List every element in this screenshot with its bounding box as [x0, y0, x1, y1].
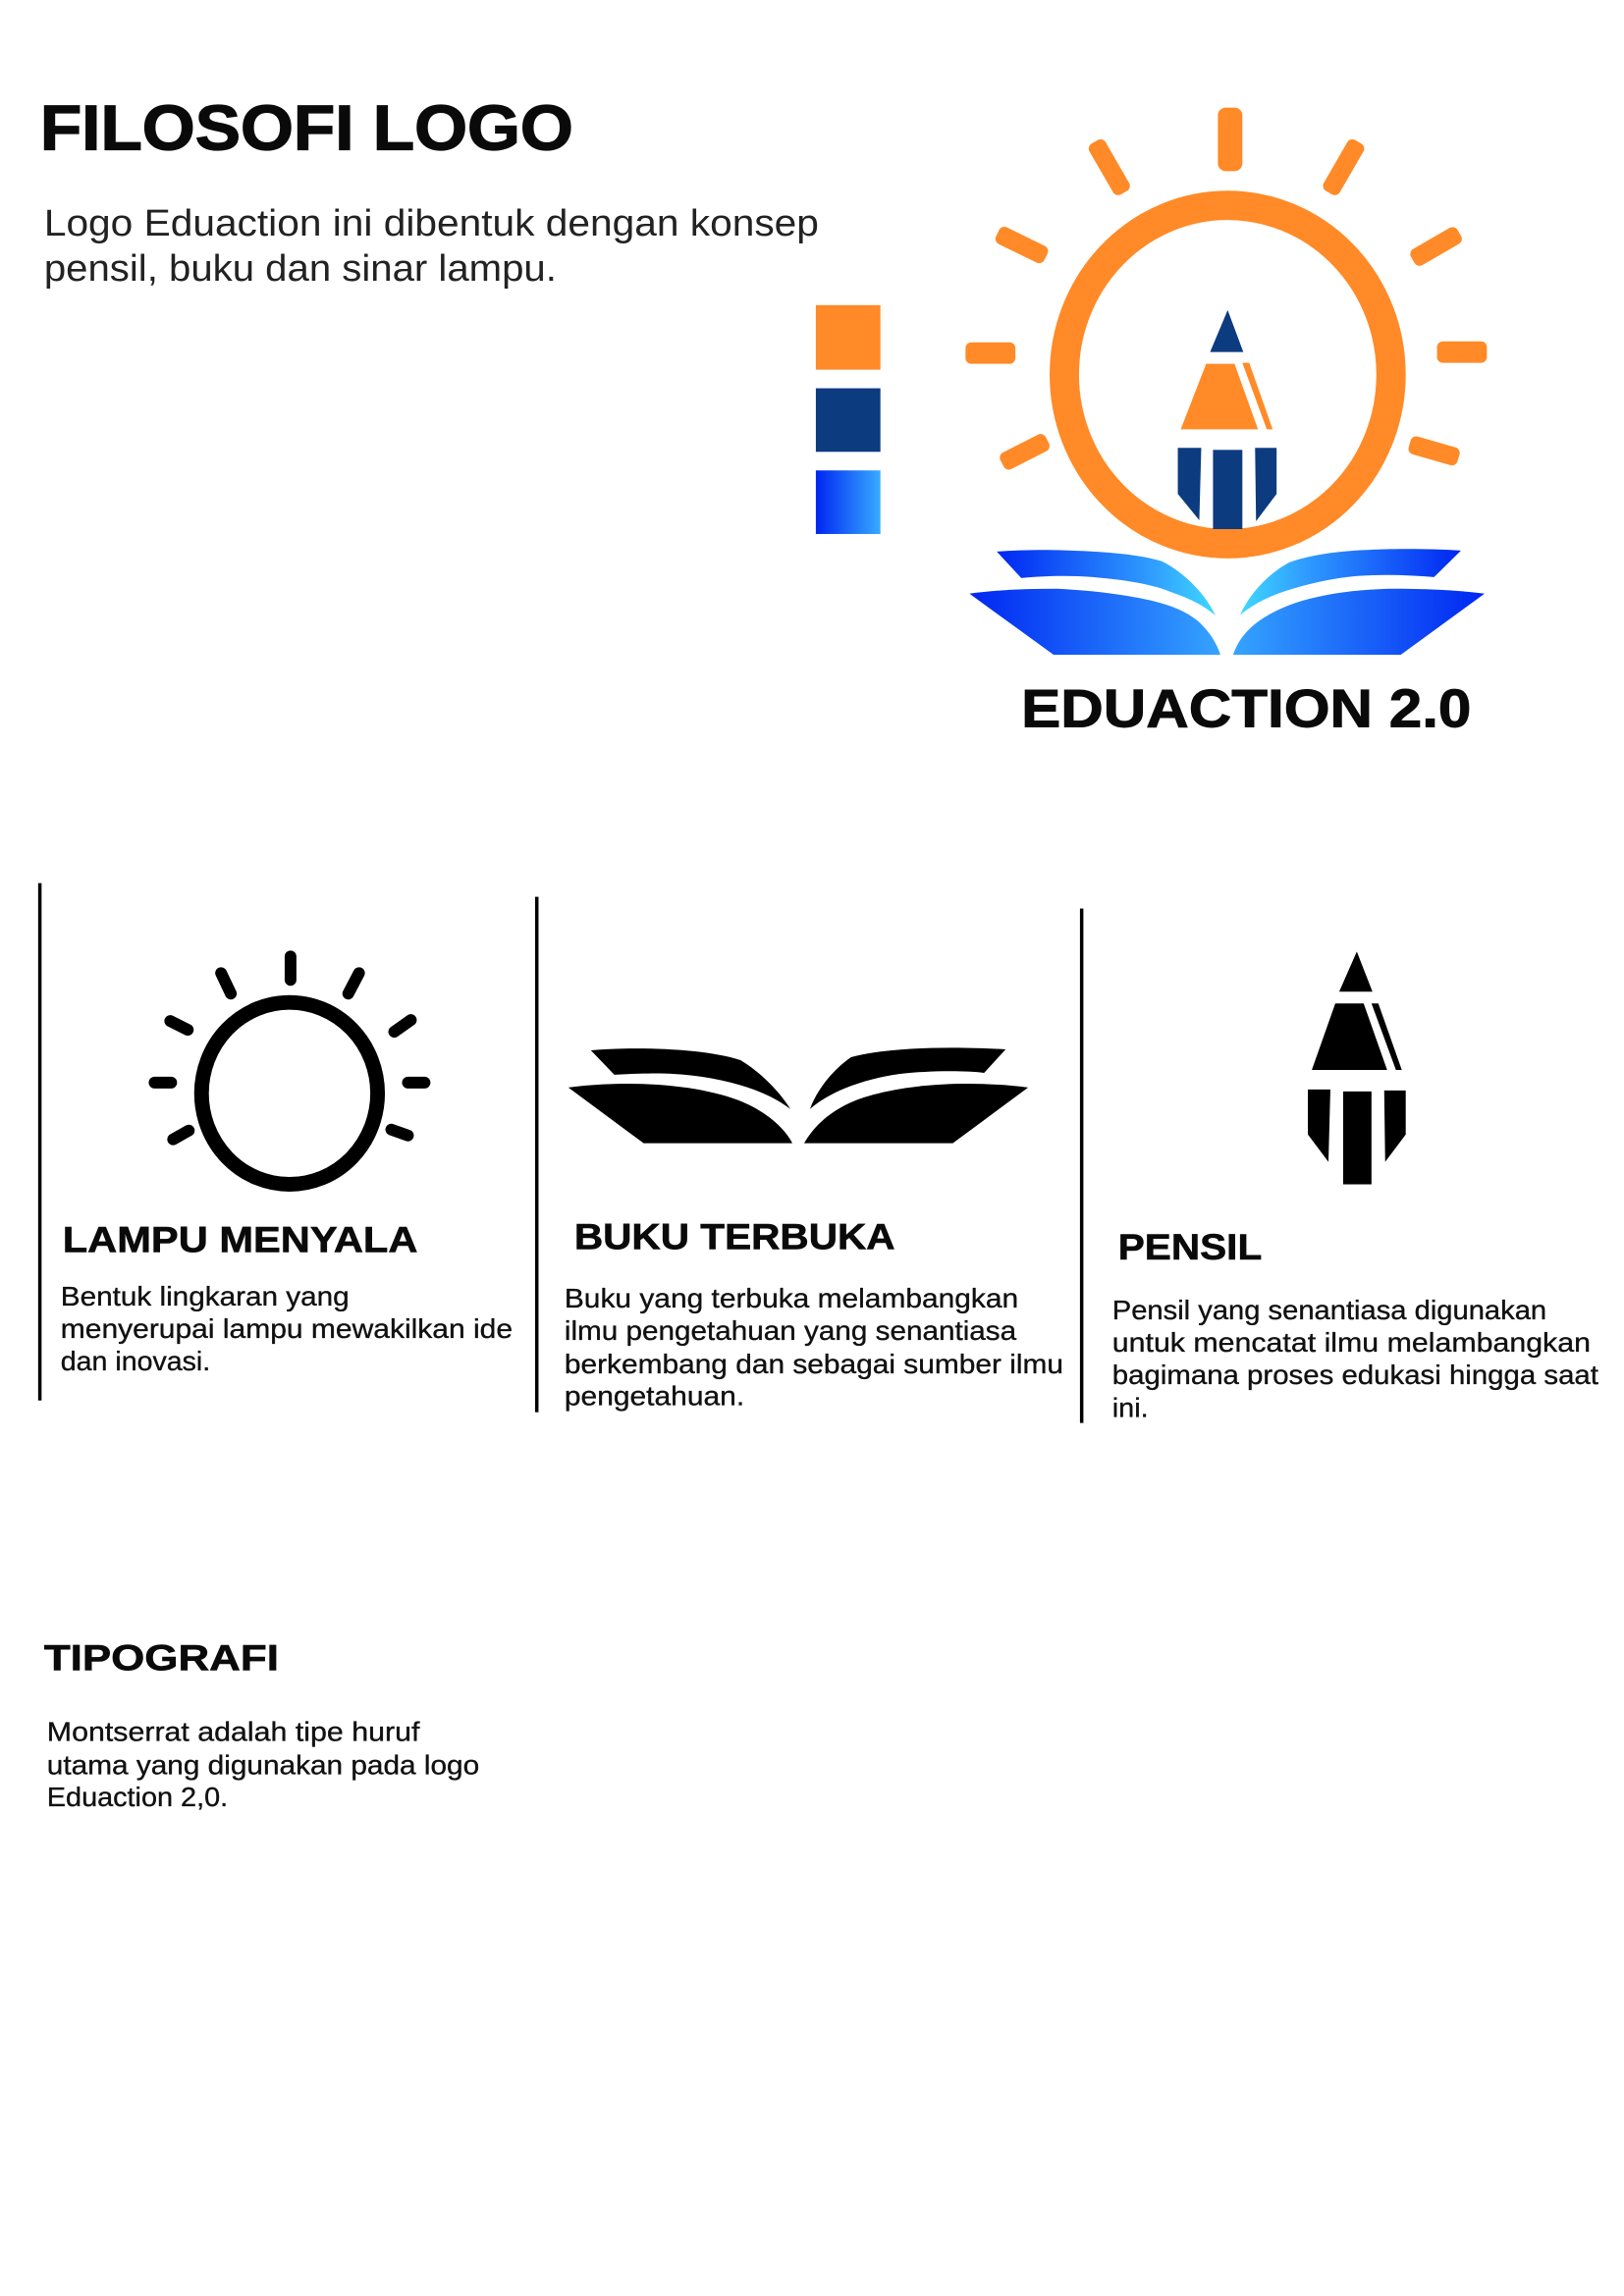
description: pensil [1112, 1295, 1598, 1423]
heading: tipografi: TIPOGRAFI [44, 1638, 279, 1679]
panel: buku terbuka [535, 897, 1063, 1413]
description: pensil: bagimana proses edukasi hingga saat [1112, 1360, 1598, 1390]
icon: pencil [1308, 951, 1406, 1185]
description: buku terbuka: pengetahuan. [565, 1381, 744, 1412]
panel: tipografi [44, 1638, 479, 1812]
logo wordmark: EDUACTION 2.0 [1021, 677, 1471, 738]
description: buku terbuka: Buku yang terbuka melambangkan [565, 1283, 1018, 1313]
intro text: pensil, buku dan sinar lampu. [44, 248, 557, 290]
description: tipografi [47, 1716, 479, 1812]
panel: pensil [1080, 909, 1598, 1423]
description: pensil: ini. [1112, 1393, 1149, 1423]
description: tipografi: Eduaction 2,0. [47, 1782, 228, 1812]
description: lampu menyala [61, 1281, 513, 1376]
description: lampu menyala: menyerupai lampu mewakilkan ide [61, 1313, 513, 1344]
description: buku terbuka: ilmu pengetahuan yang senantiasa [565, 1315, 1017, 1346]
colour swatches [816, 305, 881, 534]
description: pensil: untuk mencatat ilmu melambangkan [1112, 1327, 1591, 1358]
description: buku terbuka: berkembang dan sebagai sumber ilmu [565, 1349, 1063, 1379]
intro text: Logo Eduaction ini dibentuk dengan konsep [44, 203, 819, 244]
title: FILOSOFI LOGO [40, 91, 573, 163]
intro text [44, 203, 819, 290]
heading: buku terbuka: BUKU TERBUKA [574, 1216, 895, 1256]
description: lampu menyala: Bentuk lingkaran yang [61, 1281, 350, 1311]
description: buku terbuka [565, 1283, 1063, 1412]
panel: lampu menyala [38, 883, 513, 1401]
logo: sun rays [965, 108, 1487, 471]
heading: pensil: PENSIL [1118, 1227, 1262, 1267]
icon: lamp [154, 956, 424, 1185]
logo: pencil [1178, 310, 1276, 529]
logo: lamp ring [1064, 205, 1391, 544]
description: tipografi: utama yang digunakan pada logo [47, 1749, 479, 1780]
logo [965, 108, 1487, 738]
icon: open book [568, 1047, 1028, 1144]
description: tipografi: Montserrat adalah tipe huruf [47, 1716, 420, 1746]
description: lampu menyala: dan inovasi. [61, 1346, 210, 1376]
description: pensil: Pensil yang senantiasa digunakan [1112, 1295, 1546, 1325]
heading: lampu menyala: LAMPU MENYALA [63, 1219, 417, 1259]
logo: open book [969, 549, 1485, 655]
